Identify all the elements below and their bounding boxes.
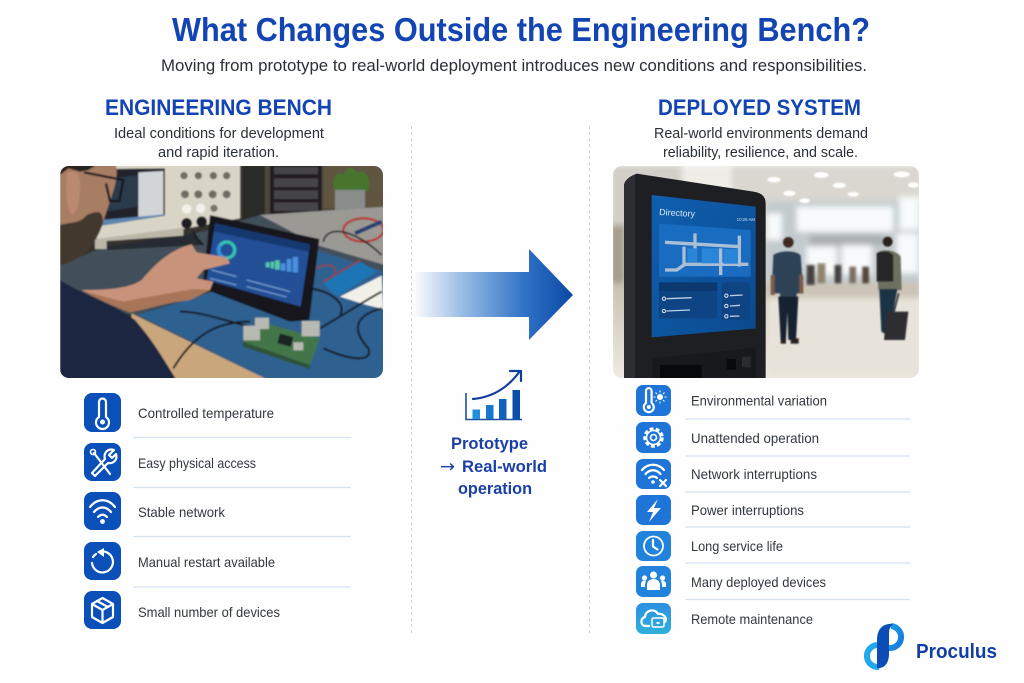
- photo: deployed kiosk in airport terminal: [610, 165, 922, 380]
- item: small number of devices: [84, 591, 280, 629]
- subtitle: Moving from prototype to real-world deployment introduces new conditions and responsibilities.: [161, 56, 867, 75]
- description: deployed system: reliability, resilience, and scale.: [663, 145, 858, 161]
- column dividers: [412, 126, 590, 634]
- logo: Proculus: [867, 624, 997, 668]
- wordmark: Proculus: [916, 641, 997, 663]
- red cable: [343, 218, 383, 242]
- item: network interruptions: [636, 459, 817, 489]
- panel: engineering bench heading: [105, 95, 332, 161]
- item: controlled temperature: [84, 393, 274, 432]
- item: unattended operation: [636, 422, 819, 453]
- description: engineering bench: [114, 126, 324, 161]
- item: many deployed devices: Many deployed devices: [691, 574, 826, 590]
- list: engineering bench conditions: [84, 393, 351, 629]
- list: deployed system conditions: [636, 385, 910, 634]
- person walking: [771, 237, 908, 344]
- person with suitcase: [883, 237, 893, 247]
- item: small number of devices: Small number of devices: [138, 604, 280, 620]
- drawers: [270, 165, 322, 216]
- item: manual restart available: [84, 542, 275, 580]
- item: unattended operation: Unattended operation: [691, 430, 819, 446]
- mat: [137, 250, 385, 380]
- item: easy physical access: [84, 443, 256, 481]
- item: many deployed devices: [636, 566, 826, 597]
- cables: [173, 232, 382, 368]
- item: remote maintenance: [636, 603, 813, 634]
- description: deployed system: Real-world environments demand: [654, 126, 868, 142]
- wood: [130, 313, 268, 380]
- desk: [60, 207, 385, 315]
- callout: prototype to real-world operation: operation: [458, 479, 532, 498]
- heading: engineering bench: ENGINEERING BENCH: [105, 95, 332, 120]
- photo: engineer at bench with touchscreen: [60, 165, 385, 380]
- item: long service life: [636, 531, 783, 561]
- callout: prototype to real-world operation: Prototype: [451, 434, 528, 453]
- title: What Changes Outside the Engineering Bench?: [172, 12, 870, 49]
- description: engineering bench: and rapid iteration.: [158, 145, 279, 161]
- item: controlled temperature: Controlled temperature: [138, 405, 274, 421]
- arm and hand: [81, 243, 231, 302]
- callout: prototype to real-world operation: Real-world: [462, 457, 547, 476]
- item: power interruptions: [636, 495, 804, 525]
- tablet: [203, 215, 319, 322]
- item: power interruptions: Power interruptions: [691, 502, 804, 518]
- item: easy physical access: Easy physical access: [138, 455, 256, 471]
- description: deployed system: [654, 126, 868, 161]
- item: network interruptions: Network interruptions: [691, 466, 817, 482]
- item: environmental variation: [636, 385, 827, 416]
- callout: prototype to real-world operation: [440, 434, 547, 498]
- item: remote maintenance: Remote maintenance: [691, 611, 813, 627]
- oscilloscope: [97, 165, 240, 240]
- item: stable network: [84, 492, 226, 530]
- item: environmental variation: Environmental variation: [691, 392, 827, 408]
- plant: [333, 168, 369, 191]
- callout: prototype to real-world operation: →: [440, 457, 455, 477]
- heading: deployed system: DEPLOYED SYSTEM: [658, 95, 861, 120]
- item: manual restart available: Manual restart available: [138, 554, 275, 570]
- kiosk clock: 10:25 AM: [737, 217, 755, 222]
- kiosk slots: [660, 357, 750, 378]
- panel: deployed system heading: [654, 95, 868, 161]
- description: engineering bench: Ideal conditions for development: [114, 126, 324, 142]
- item: stable network: Stable network: [138, 504, 226, 520]
- icon: logo mark: [867, 624, 901, 668]
- arrow: bench to deployment: [412, 249, 573, 340]
- head: [60, 166, 118, 226]
- kiosk screen: [652, 195, 756, 337]
- kiosk body: [624, 174, 766, 380]
- icon: growth chart: [466, 371, 522, 420]
- kiosk screen title: Directory: [659, 207, 696, 219]
- raspberry pi: [243, 322, 320, 365]
- kiosk map: [659, 224, 751, 320]
- item: long service life: Long service life: [691, 538, 783, 554]
- shirt: [60, 280, 177, 380]
